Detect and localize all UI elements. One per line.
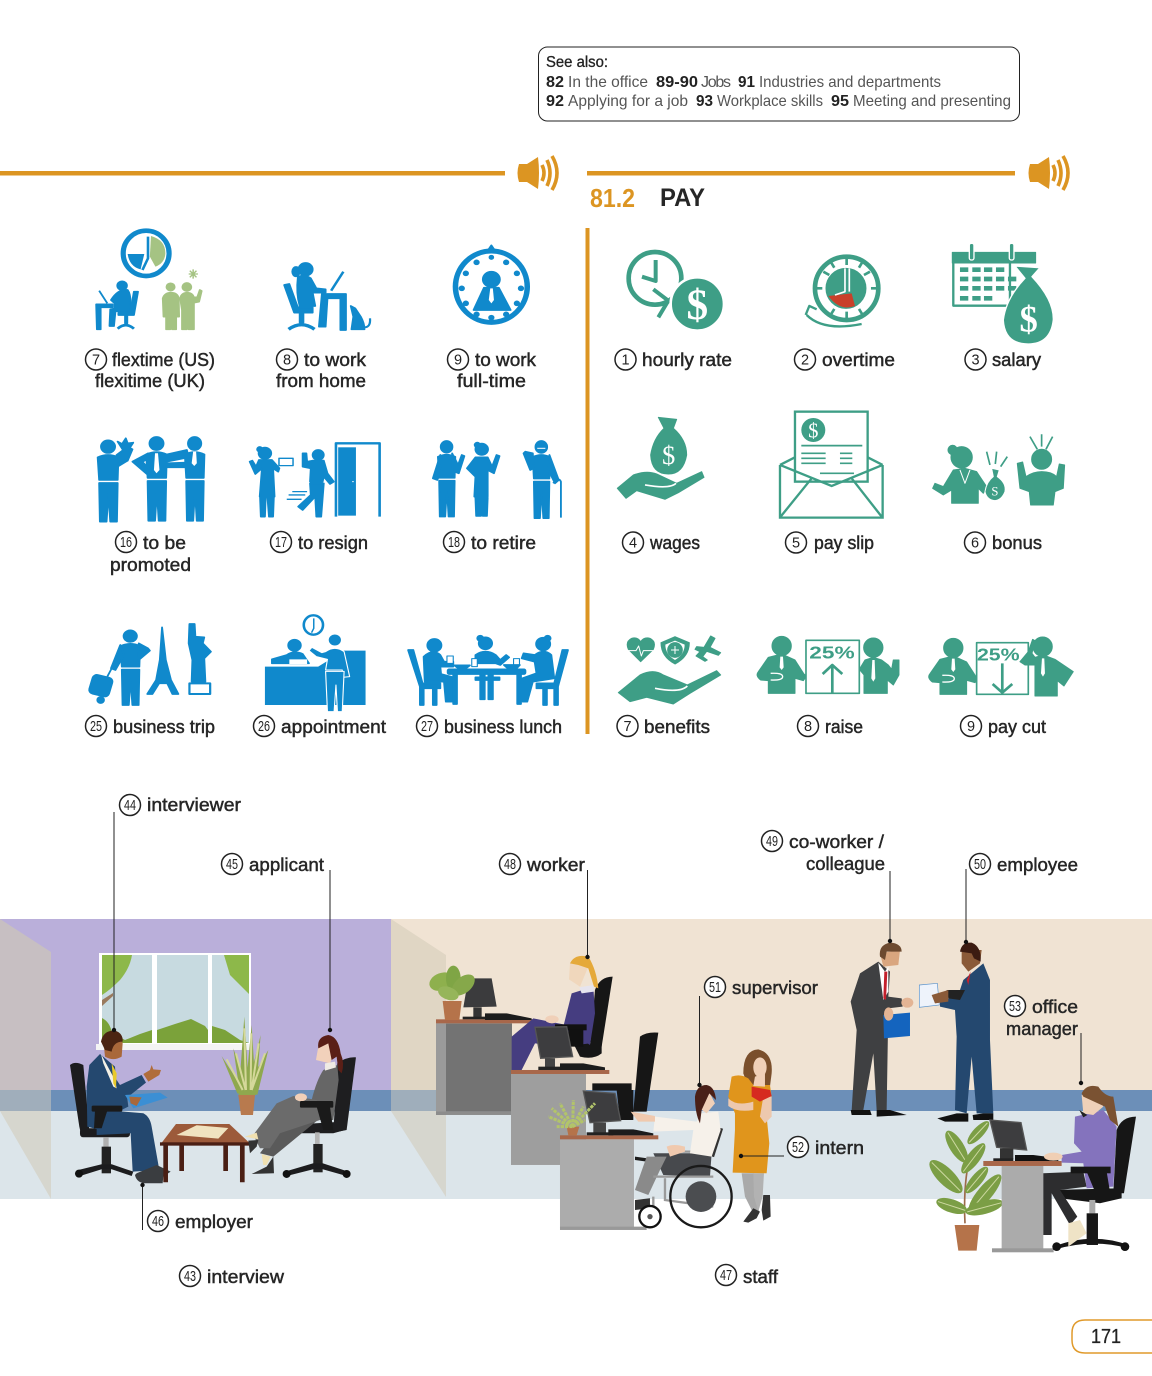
label: to work full-time	[448, 349, 537, 391]
label: bonus	[964, 532, 1042, 553]
label: overtime: 2	[801, 352, 809, 368]
label: co-worker colleague: co-worker /	[789, 832, 884, 852]
label: salary: 3	[971, 352, 980, 368]
label: to be promoted: promoted	[110, 555, 191, 575]
item: salary	[952, 243, 1053, 370]
label: to work full-time: 9	[454, 352, 462, 368]
label: business trip: 25	[90, 719, 102, 735]
label: appointment: appointment	[281, 717, 386, 737]
panel: office scene background	[0, 919, 1152, 1199]
item: wages	[617, 417, 704, 553]
office manager	[1043, 1086, 1136, 1251]
label: staff: 47	[720, 1268, 732, 1284]
supervisor in wheelchair	[631, 1085, 732, 1227]
icon: clock with red overtime wedge	[806, 257, 878, 326]
label: wages	[622, 532, 700, 553]
employer in chair	[70, 1031, 171, 1183]
window with trees	[96, 953, 252, 1050]
label: to work full-time: full-time	[457, 371, 526, 391]
label: employee: employee	[997, 855, 1078, 875]
empty chair	[592, 1032, 658, 1120]
panel: left vocabulary icons	[86, 231, 568, 737]
icon: clock, desk worker and couple	[96, 231, 202, 329]
heading: 81.2 pay: 81.2	[590, 183, 635, 213]
leader lines	[112, 812, 1083, 1230]
desk and computer 2	[511, 1027, 609, 1165]
see also box	[538, 47, 1020, 121]
item: overtime	[794, 257, 895, 370]
label: worker	[500, 854, 585, 875]
heading: 81.2 pay: PAY	[660, 184, 705, 212]
icon: calendar with money bag: $	[1019, 299, 1038, 340]
see also box: 91	[738, 74, 755, 91]
item: resign	[250, 443, 380, 553]
label: interviewer	[120, 794, 241, 816]
label: pay slip: pay slip	[814, 533, 874, 553]
label: bonus: 6	[971, 536, 979, 552]
icon: three people at table	[408, 636, 568, 705]
label: to retire: 18	[448, 535, 460, 551]
label: interview: 43	[184, 1269, 196, 1285]
label: office manager	[1004, 996, 1078, 1039]
co-worker in grey suit	[851, 943, 913, 1117]
label: intern: 52	[792, 1140, 804, 1156]
label: supervisor: 51	[709, 980, 721, 996]
see also box: 92	[546, 93, 564, 110]
label: to work from home: from home	[276, 371, 366, 391]
label: flextime: flexitime (UK)	[95, 371, 205, 391]
label: overtime	[794, 349, 895, 370]
label: co-worker colleague	[762, 830, 885, 874]
label: to be promoted	[110, 532, 191, 575]
label: employer	[148, 1210, 253, 1232]
worker at desk	[512, 956, 613, 1070]
panel: pay vocabulary icons	[615, 243, 1073, 737]
label: office manager: 53	[1009, 999, 1021, 1015]
label: raise	[798, 716, 863, 737]
icon: woman with bag and excited man: S	[991, 485, 998, 499]
item: retire	[433, 441, 561, 553]
icon: three older people with cane	[433, 441, 561, 518]
item: work from home	[276, 263, 370, 391]
item: raise	[757, 636, 899, 737]
label: interviewer: interviewer	[147, 795, 241, 815]
label: to resign: 17	[275, 535, 287, 551]
icon: traveller with suitcase and landmarks	[88, 624, 211, 705]
label: employer: 46	[152, 1214, 164, 1230]
see also box: In the office	[568, 74, 648, 91]
page number tab	[1072, 1320, 1152, 1353]
label: flextime: 7	[92, 352, 100, 368]
label: wages: wages	[649, 533, 700, 553]
item: promoted	[98, 437, 204, 575]
label: worker: worker	[526, 855, 585, 875]
label: employer: employer	[175, 1212, 253, 1232]
see also box: 82	[546, 74, 564, 91]
icon: person inside clock	[455, 245, 527, 322]
scene: interview	[70, 1017, 356, 1183]
label: to work from home	[276, 349, 367, 391]
label: hourly rate: hourly rate	[642, 350, 732, 370]
scene: workstations	[427, 956, 772, 1230]
applicant in chair	[245, 1035, 356, 1178]
item: appointment	[254, 615, 386, 737]
icon: reception desk with clock	[265, 615, 366, 712]
item: bonus	[933, 434, 1065, 553]
see also box: 89-90	[656, 74, 698, 91]
item: business trip	[86, 624, 215, 737]
right section bar with speaker icon	[587, 156, 1068, 190]
label: appointment	[254, 716, 386, 737]
label: co-worker colleague: 49	[766, 834, 778, 850]
icon: three people with handshake	[98, 437, 204, 522]
label: office manager: manager	[1006, 1019, 1078, 1039]
label: raise: 8	[804, 719, 812, 735]
label: to resign	[270, 532, 368, 553]
label: interviewer: 44	[124, 798, 136, 814]
item: benefits	[617, 636, 721, 737]
label: applicant: 45	[226, 857, 238, 873]
label: supervisor	[704, 976, 818, 998]
label: employee	[970, 854, 1078, 875]
icon: woman at desk with cat	[284, 263, 370, 330]
label: benefits: 7	[623, 719, 632, 735]
label: business lunch: business lunch	[444, 717, 562, 737]
label: benefits: benefits	[644, 717, 710, 737]
label: raise: raise	[825, 717, 863, 737]
see also box: See also:	[546, 54, 608, 71]
label: interview: interview	[207, 1267, 285, 1287]
icon: two people with 25% down chart	[929, 637, 1073, 696]
icon: clock and dollar coin: $	[686, 281, 708, 329]
desk and computer 1	[427, 966, 534, 1115]
see also box: 93	[696, 93, 713, 110]
label: applicant: applicant	[249, 855, 324, 875]
label: to be promoted: 16	[120, 535, 132, 551]
icon: envelope with pay slip: $	[808, 420, 818, 442]
label: worker: 48	[504, 857, 516, 873]
label: staff: staff	[743, 1267, 779, 1287]
label: to work from home: to work	[304, 350, 367, 370]
label: benefits	[617, 716, 710, 737]
label: to retire: to retire	[471, 533, 536, 553]
label: to work full-time: to work	[475, 350, 537, 370]
item: hourly rate	[615, 252, 732, 370]
icon: hand with heart, shield and plane	[618, 636, 721, 704]
potted plant	[222, 1017, 268, 1115]
icon: two people with 25% up chart	[757, 636, 899, 693]
see also box: Workplace skills	[717, 93, 823, 110]
item: pay cut	[929, 637, 1073, 737]
icon: two people with 25% down chart: 25%	[977, 645, 1020, 665]
label: to be promoted: to be	[143, 533, 186, 553]
icon: woman, man leaving through door	[250, 443, 380, 517]
label: applicant	[222, 854, 324, 875]
coffee table	[160, 1124, 252, 1182]
label: office manager: office	[1032, 997, 1078, 1017]
label: intern: intern	[815, 1138, 864, 1158]
label: business trip: business trip	[113, 717, 215, 737]
label: flextime: flextime (US)	[112, 350, 215, 370]
label: interview	[180, 1266, 285, 1287]
scene: colleagues and office manager	[851, 943, 1136, 1252]
item: full-time	[448, 245, 537, 391]
label: pay slip: 5	[792, 536, 800, 552]
label: appointment: 26	[258, 719, 270, 735]
heading: 81.2 pay	[590, 183, 705, 213]
label: business lunch: 27	[421, 719, 433, 735]
see also box: Applying for a job	[568, 93, 688, 110]
label: to retire	[444, 532, 536, 553]
label: bonus: bonus	[992, 533, 1042, 553]
icon: two people with 25% up chart: 25%	[809, 643, 855, 663]
label: pay slip	[786, 532, 874, 553]
rubber plant	[925, 1118, 1006, 1251]
item: business lunch	[408, 636, 568, 737]
employee in navy suit	[919, 943, 993, 1122]
label: pay cut: 9	[967, 719, 975, 735]
label: pay cut: pay cut	[988, 717, 1046, 737]
label: flextime	[86, 349, 215, 391]
label: overtime: overtime	[822, 350, 895, 370]
label: to work from home: 8	[283, 352, 291, 368]
desk and computer	[983, 1120, 1062, 1252]
label: to resign: to resign	[298, 533, 368, 553]
label: hourly rate: 1	[621, 352, 630, 368]
see also box: Industries and departments	[759, 74, 941, 91]
vertical divider	[586, 228, 590, 734]
see also box: 95	[831, 93, 849, 110]
icon: hand holding money bag: $	[662, 440, 675, 470]
label: wages: 4	[629, 536, 637, 552]
icon: envelope with pay slip	[780, 412, 883, 518]
label: salary: salary	[992, 350, 1041, 370]
label: employee: 50	[974, 857, 986, 873]
intern	[728, 1049, 772, 1223]
item: pay slip	[780, 412, 883, 553]
label: salary	[965, 349, 1041, 370]
see also box: Jobs	[701, 74, 731, 91]
label: staff	[716, 1264, 779, 1287]
label: intern	[788, 1136, 864, 1158]
left section bar with speaker icon	[0, 156, 557, 190]
item: flextime	[86, 231, 215, 391]
see also box: Meeting and presenting	[853, 93, 1011, 110]
label: supervisor: supervisor	[732, 978, 818, 998]
page number tab: 171	[1091, 1326, 1121, 1348]
label: pay cut	[960, 716, 1046, 737]
label: co-worker colleague: colleague	[806, 854, 885, 874]
label: hourly rate	[615, 349, 732, 370]
desk and computer 3	[548, 1091, 658, 1230]
